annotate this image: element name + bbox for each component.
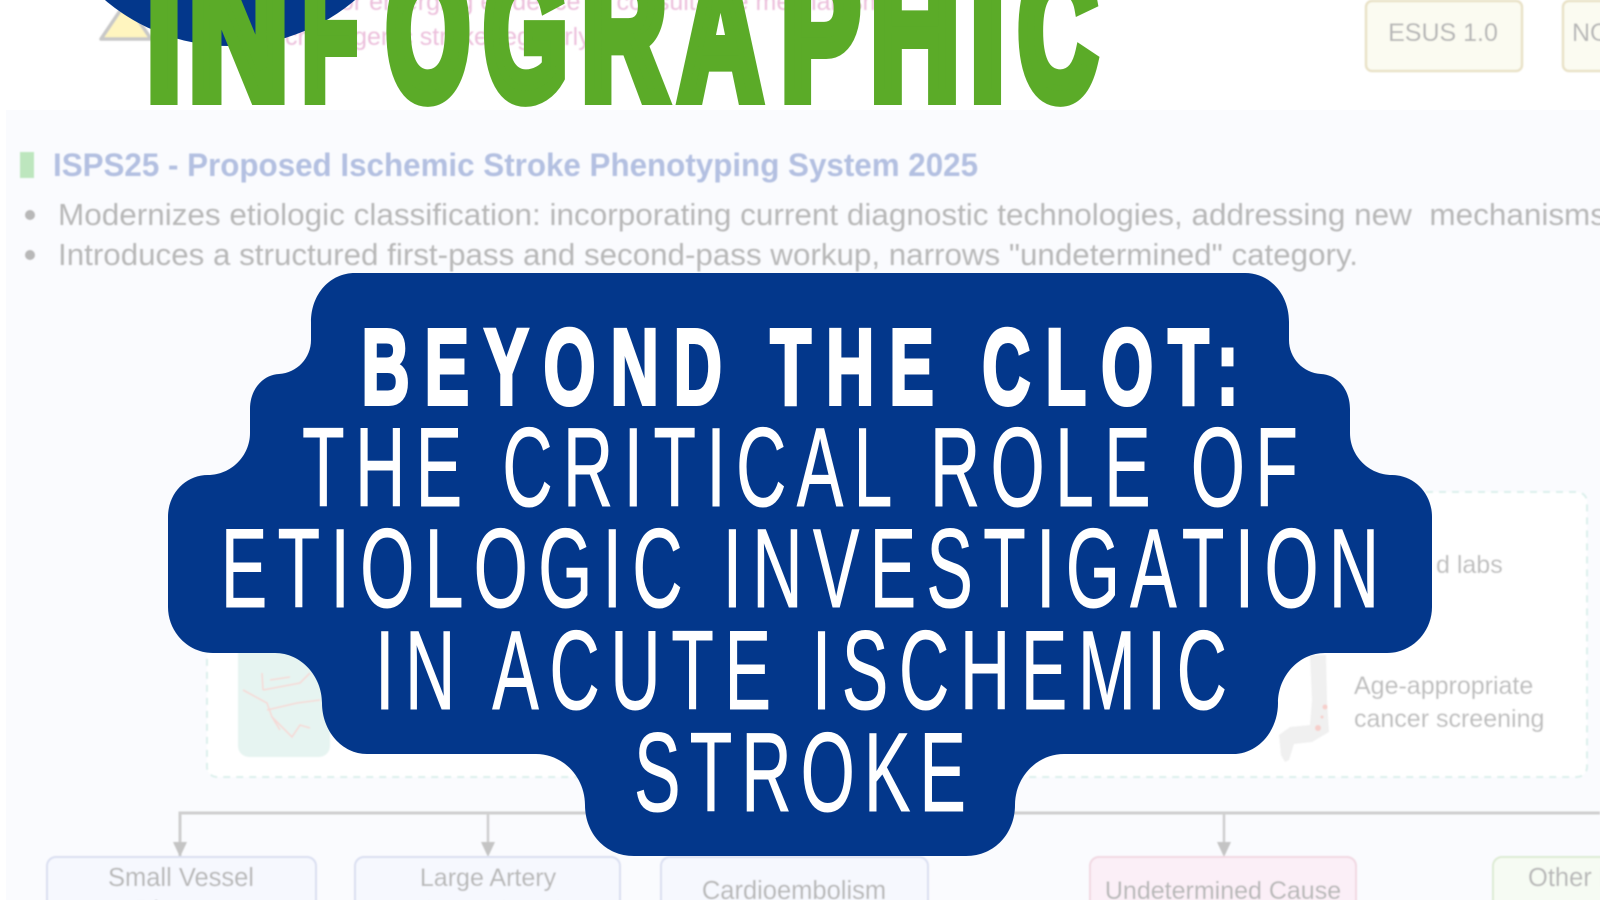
warning note pink text [285,0,883,51]
badge: ESUS 1.0 [1366,1,1522,71]
box: cardioembolism [661,857,928,900]
section heading: ISPS25 - Proposed Ischemic Stroke Phenotyping System 2025 [53,147,978,183]
text: cancer screening [1354,672,1544,733]
warning note pink text: cryptogenic stroke regularly plan [285,23,645,51]
banner shape [168,273,1432,856]
box: large artery atherosclerosis: Large Artery [420,864,557,892]
text: standard labs: d labs [1436,551,1503,579]
dashed workup panel [207,492,1587,777]
box: small vessel disease [47,857,316,900]
title banner [168,273,1432,856]
subtitle line 3: IN ACUTE ISCHEMIC [375,608,1227,733]
subtitle lines [221,405,1379,835]
subtitle line 2: ETIOLOGIC INVESTIGATION [221,506,1379,631]
box: small vessel disease: Small Vessel [108,864,254,892]
bullet list: Introduces a structured first-pass and second-pass workup, narrows "undetermined" category. [58,237,1358,272]
blue circle [37,0,423,46]
box: undetermined cause [1090,857,1356,900]
icon: cerebral vessels [238,640,330,757]
bullet list: Modernizes etiologic classification: incorporating current diagnostic technologies, addressing new mechanisms [58,197,1600,232]
arrowheads [173,842,1231,857]
subtitle line 1: THE CRITICAL ROLE OF [302,405,1298,530]
box: other determined [1493,857,1600,900]
badge: ESUS 1.0: ESUS 1.0 [1388,19,1498,47]
icon: gastrointestinal tract [1279,655,1329,762]
text: cancer screening: Age-appropriate [1354,672,1533,700]
box: large artery atherosclerosis [355,857,620,900]
text: cancer screening: cancer screening [1354,705,1544,733]
icon: warning triangle [101,2,151,39]
subtitle line 4: STROKE [634,710,966,835]
title line: beyond the clot: BEYOND THE CLOT: [361,308,1239,428]
bullet list [25,197,1600,272]
flow connector [180,813,1600,856]
badge: clipped next item [1563,1,1600,71]
heading marker [20,152,34,178]
